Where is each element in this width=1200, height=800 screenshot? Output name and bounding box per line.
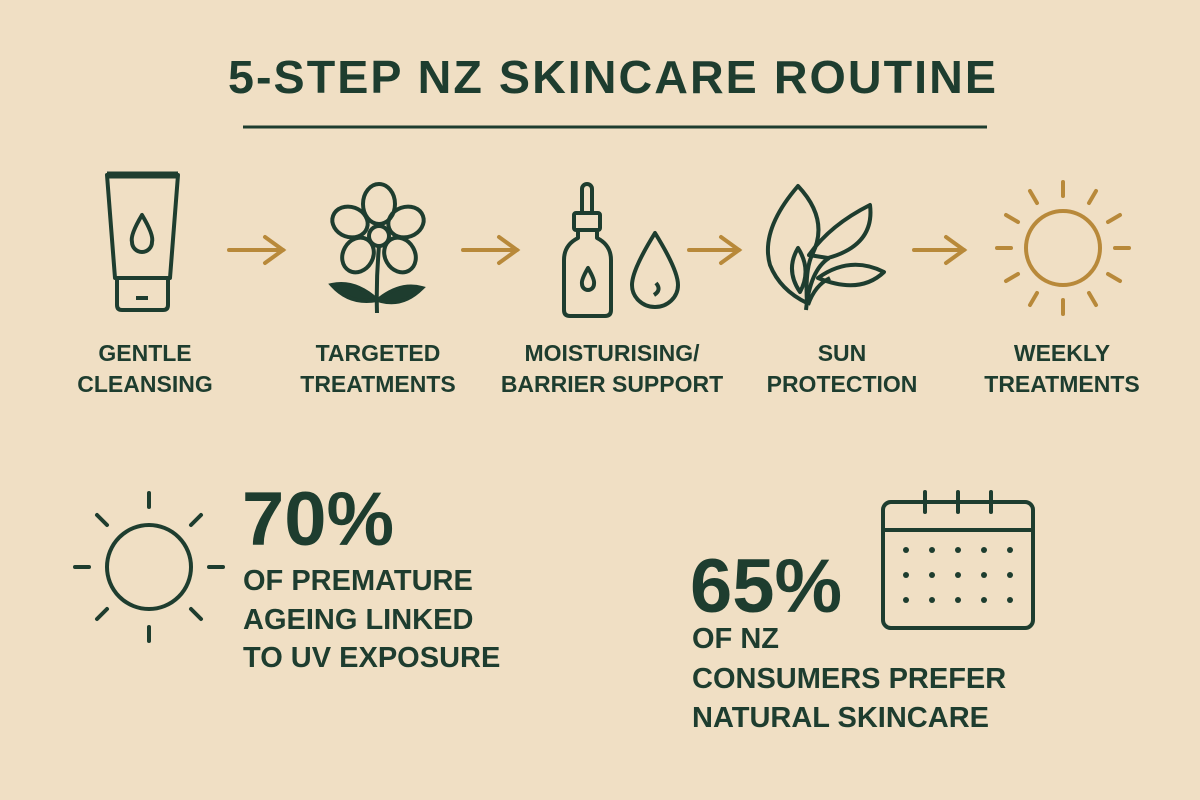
icon: leaves bbox=[768, 186, 884, 310]
title: 5-STEP NZ SKINCARE ROUTINE bbox=[228, 51, 998, 103]
stat: 70%: TO UV EXPOSURE bbox=[243, 642, 500, 674]
stat: 65% bbox=[690, 544, 1006, 734]
stat: 65%: CONSUMERS PREFER bbox=[692, 663, 1006, 695]
step labels: GENTLE bbox=[98, 340, 192, 366]
step labels: SUN bbox=[818, 340, 866, 366]
step labels: TARGETED bbox=[316, 340, 440, 366]
stat: 65%: 65% bbox=[690, 544, 842, 629]
stat: 70%: 70% bbox=[242, 477, 394, 562]
step labels: BARRIER SUPPORT bbox=[501, 371, 723, 397]
stat: 70% bbox=[242, 477, 500, 674]
arrow 2 bbox=[463, 237, 517, 263]
stat: 65%: NATURAL SKINCARE bbox=[692, 702, 989, 734]
step labels: PROTECTION bbox=[767, 371, 917, 397]
arrow 3 bbox=[689, 237, 739, 263]
icon: calendar bbox=[883, 492, 1033, 628]
step labels bbox=[77, 340, 1140, 397]
icon: green sun bbox=[75, 493, 223, 641]
icon: dropper bottle and drop bbox=[564, 184, 678, 316]
stat: 70%: AGEING LINKED bbox=[243, 604, 473, 636]
stat: 70%: OF PREMATURE bbox=[243, 565, 473, 597]
stat: 65%: OF NZ bbox=[692, 623, 779, 655]
arrow 4 bbox=[914, 237, 964, 263]
step labels: TREATMENTS bbox=[300, 371, 456, 397]
step labels: MOISTURISING/ bbox=[524, 340, 700, 366]
arrow 1 bbox=[229, 237, 283, 263]
step labels: WEEKLY bbox=[1014, 340, 1110, 366]
icon: flower bbox=[328, 184, 428, 313]
step labels: TREATMENTS bbox=[984, 371, 1140, 397]
step labels: CLEANSING bbox=[77, 371, 213, 397]
icon: cleanser tube bbox=[107, 175, 178, 310]
icon: gold sun bbox=[997, 182, 1129, 314]
